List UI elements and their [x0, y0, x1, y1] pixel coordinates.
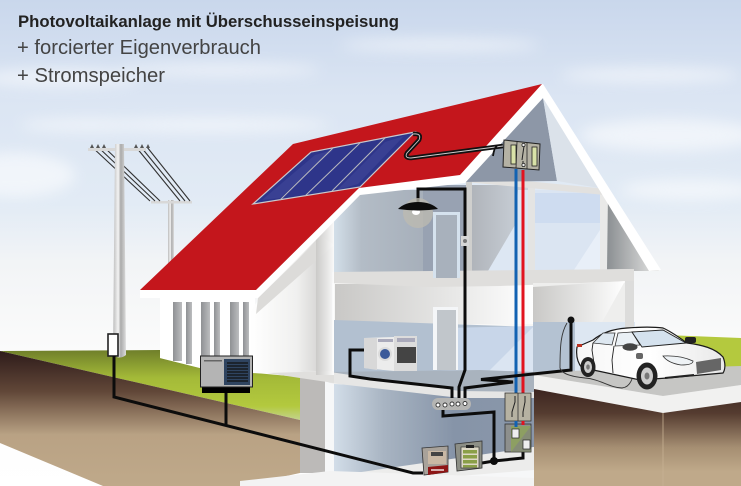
left side wall: [316, 190, 334, 375]
roof switch box: [503, 140, 540, 170]
house main wall: [250, 190, 335, 375]
ground floor band and room: [267, 269, 635, 398]
cable: lamp and sockets: [350, 189, 571, 461]
basement wall: [240, 377, 534, 486]
washing machine and oven: [364, 336, 417, 371]
ground: grass strip: [0, 350, 300, 420]
power poles with overhead lines: [88, 144, 192, 358]
roof underside shadow: [256, 236, 334, 314]
solar panel: [253, 132, 415, 204]
distribution bar: [432, 398, 471, 410]
basement DC switches: [505, 393, 531, 421]
wall charger and charging cable: [560, 316, 635, 388]
house back wing with columns: [160, 298, 255, 372]
ground: earth left: [0, 351, 300, 486]
outside meter box: [108, 334, 118, 356]
inverter box: [505, 421, 531, 452]
subtitle: forcierter Eigenverbrauch: + forcierter Eigenverbrauch: [17, 36, 261, 59]
cable junction node: [490, 457, 498, 465]
roof red: [140, 84, 542, 290]
subtitle: Stromspeicher: + Stromspeicher: [17, 64, 165, 87]
title: Photovoltaikanlage mit Überschusseinspeisung: [18, 12, 399, 31]
grid cable underground: [114, 356, 523, 473]
upper floor rooms: [334, 175, 608, 277]
roof white fascia: [140, 84, 661, 298]
socket on wall: [461, 236, 469, 246]
ceiling lamp: [398, 198, 438, 228]
battery storage: [455, 441, 482, 471]
electric car: [577, 327, 725, 390]
outdoor unit: [200, 356, 252, 393]
driveway platform: [534, 366, 741, 486]
upstairs door: [433, 212, 460, 278]
electricity meter: [422, 446, 448, 475]
blue and red DC lines: [516, 169, 523, 393]
gable triangle: [460, 98, 659, 271]
right background grass: [665, 335, 741, 378]
cable from solar panel to DC switch: [406, 134, 503, 158]
